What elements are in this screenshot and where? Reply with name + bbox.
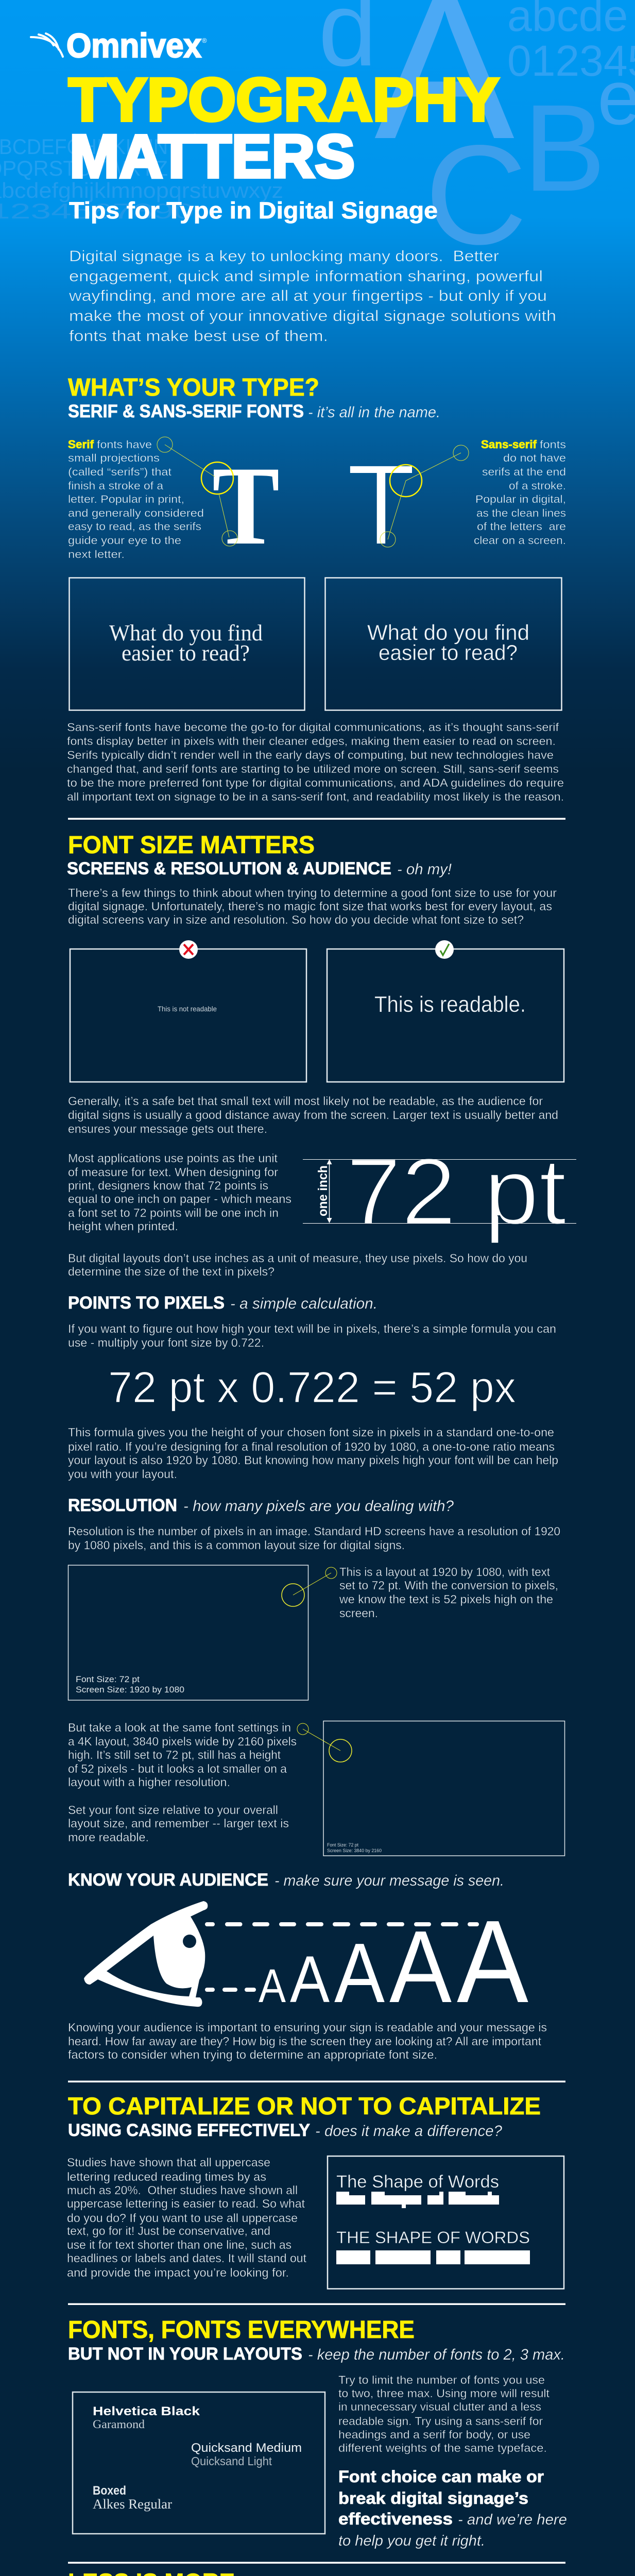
intro paragraph: engagement, quick and simple information sharing, powerful bbox=[69, 268, 543, 285]
text: serif description: letter. Popular in print, bbox=[68, 494, 184, 505]
text: resolution intro bbox=[68, 1524, 560, 1552]
text: sans-serif explanation: fonts display better in pixels with their cleaner edges, making them easier to read on screen. bbox=[67, 735, 556, 748]
text: audience explanation: heard. How far away are they? How big is the screen they are looking at? All are important bbox=[68, 2035, 542, 2048]
text: limit fonts: Try to limit the number of fonts you use bbox=[338, 2374, 545, 2386]
text: intro: There’s a few things to think about when trying to determine a good font size to use for your bbox=[68, 886, 557, 900]
subheading: SCREENS & RESOLUTION & AUDIENCE bbox=[67, 859, 391, 878]
text: points explanation: height when printed. bbox=[68, 1219, 178, 1233]
text: sans-serif description: of a stroke. bbox=[509, 480, 566, 492]
text: sans-serif explanation: changed that, and serif fonts are starting to be utilized more on screen. Still, sans-serif seems bbox=[67, 762, 559, 775]
subheading: BUT NOT IN YOUR LAYOUTS bbox=[68, 2344, 302, 2364]
panel: 3840 by 2160 layout: Font Size: 72 pt bbox=[327, 1842, 358, 1848]
text: sans-serif description: Sans-serif bbox=[481, 438, 537, 451]
text: casing studies: use it for text shorter than one line, such as bbox=[67, 2238, 291, 2251]
panel: font pairs: Garamond bbox=[93, 2418, 145, 2431]
text: serif description: finish a stroke of a bbox=[68, 480, 163, 492]
text: casing studies: lettering reduced reading times by as bbox=[67, 2170, 266, 2183]
text: serif description: easy to read, as the serifs bbox=[68, 521, 201, 533]
text: sans-serif explanation: Serifs typically didn’t render well in the early days of computing, but new technologies have bbox=[67, 749, 554, 761]
decorative background letters: B bbox=[523, 79, 606, 217]
text: casing studies bbox=[67, 2156, 307, 2279]
text: 4K description: Set your font size relative to your overall bbox=[68, 1803, 278, 1817]
panel: not readable sample bbox=[70, 940, 306, 1082]
text: sans-serif description: clear on a screen. bbox=[474, 535, 566, 547]
logo: Omnivex: ® bbox=[202, 37, 207, 44]
letters: growing A sequence: A bbox=[457, 1896, 528, 2027]
text: formula intro: If you want to figure out how high your text will be in pixels, there’s a simple formula you can bbox=[68, 1322, 556, 1335]
sight lines bbox=[207, 1924, 477, 1990]
text: formula intro: use - multiply your font size by 0.722. bbox=[68, 1336, 264, 1349]
callout: sans-serif circles bbox=[380, 445, 469, 547]
text: resolution intro: by 1080 pixels, and this is a common layout size for digital signs. bbox=[68, 1538, 405, 1552]
icon: logo signal arcs bbox=[31, 33, 63, 57]
subheading: resolution: - how many pixels are you dealing with? bbox=[183, 1498, 454, 1515]
panel: fonts, fonts everywhere bbox=[68, 2316, 567, 2549]
intro paragraph: Digital signage is a key to unlocking many doors. Better bbox=[69, 248, 499, 265]
text: sans-serif description: serifs at the end bbox=[482, 466, 566, 478]
callout: font choice: break digital signage’s bbox=[338, 2489, 528, 2507]
chart: 72 pt measurement: 72 pt bbox=[346, 1138, 567, 1244]
panel: shape of words: The Shape of Words bbox=[336, 2172, 499, 2192]
text: casing studies: much as 20%. Other studies have shown all bbox=[67, 2183, 298, 2197]
callout: font choice: - and we’re here bbox=[458, 2512, 567, 2528]
text: points explanation: print, designers know that 72 points is bbox=[68, 1179, 268, 1192]
text: 4K description: a 4K layout, 3840 pixels wide by 2160 pixels bbox=[68, 1735, 297, 1748]
panel: shape of words bbox=[328, 2156, 564, 2289]
title bbox=[68, 66, 499, 191]
decorative background letters: C bbox=[425, 116, 527, 274]
text: 1080 layout description: we know the text is 52 pixels high on the bbox=[339, 1592, 553, 1606]
text: serif description: small projections bbox=[68, 452, 160, 464]
text: formula explanation bbox=[68, 1426, 558, 1481]
panel: serif sample bbox=[69, 578, 305, 710]
text: 4K description bbox=[68, 1721, 297, 1844]
text: pixels question bbox=[68, 1251, 527, 1278]
callout: 1080 text highlight bbox=[282, 1567, 337, 1606]
text: sans-serif description bbox=[474, 438, 566, 547]
text: casing studies: headlines or labels and dates. It will stand out bbox=[67, 2251, 307, 2265]
text: sans-serif explanation bbox=[67, 721, 564, 803]
text: serif description bbox=[68, 438, 204, 561]
text: intro: digital signage. Unfortunately, there’s no magic font size that works best for every layout, as bbox=[68, 900, 552, 913]
panel: serif sample: easier to read? bbox=[122, 640, 250, 666]
text: points explanation: of measure for text. When designing for bbox=[68, 1165, 278, 1179]
formula: 72 pt x 0.722 = 52 px bbox=[108, 1363, 516, 1412]
text: serif description: Serif bbox=[68, 438, 94, 451]
text: 1080 layout description bbox=[339, 1565, 558, 1620]
text: limit fonts: readable sign. Try using a sans-serif for bbox=[338, 2415, 543, 2428]
text: intro: digital screens vary in size and resolution. So how do you decide what font size to set? bbox=[68, 913, 524, 926]
text: formula intro bbox=[68, 1322, 556, 1349]
panel: font pairs: Quicksand Medium bbox=[191, 2441, 302, 2455]
panel: 1920 by 1080 layout: Font Size: 72 pt bbox=[76, 1674, 140, 1684]
panel: font pairs: Helvetica Black bbox=[93, 2404, 200, 2418]
text: audience explanation: factors to consider when trying to determine an appropriate font size. bbox=[68, 2048, 437, 2061]
panel: readable sample: This is readable. bbox=[374, 992, 526, 1017]
title: MATTERS bbox=[70, 123, 355, 191]
subheading: resolution: RESOLUTION bbox=[68, 1496, 177, 1515]
text: formula explanation: you with your layout. bbox=[68, 1467, 177, 1481]
text: 4K description: of 52 pixels - but it looks a lot smaller on a bbox=[68, 1762, 287, 1775]
heading: TO CAPITALIZE OR NOT TO CAPITALIZE bbox=[68, 2092, 541, 2120]
text: 4K description: more readable. bbox=[68, 1831, 149, 1844]
text: sans-serif explanation: all important text on signage to be in a sans-serif font, and readability most likely is the reason. bbox=[67, 790, 564, 803]
text: serif description: next letter. bbox=[68, 549, 125, 561]
letters: growing A sequence: A bbox=[334, 1926, 385, 2020]
intro paragraph: fonts that make best use of them. bbox=[69, 328, 328, 345]
subheading: know your audience: KNOW YOUR AUDIENCE bbox=[68, 1870, 268, 1890]
logo: Omnivex: Omnivex bbox=[66, 26, 201, 64]
text: pixels question: determine the size of the text in pixels? bbox=[68, 1265, 274, 1278]
subheading: - does it make a difference? bbox=[315, 2123, 502, 2140]
text: 1080 layout description: This is a layout at 1920 by 1080, with text bbox=[339, 1565, 551, 1579]
panel: font pairs: Quicksand Light bbox=[191, 2454, 272, 2468]
subheading: USING CASING EFFECTIVELY bbox=[68, 2121, 310, 2140]
subheading: know your audience bbox=[68, 1870, 504, 1890]
text: casing studies: do you do? If you want to use all uppercase bbox=[67, 2211, 298, 2225]
letters: growing A sequence: A bbox=[389, 1910, 452, 2024]
callout: font choice: Font choice can make or bbox=[338, 2467, 544, 2486]
text: casing studies: uppercase lettering is easier to read. So what bbox=[67, 2197, 305, 2210]
callout: font choice: to help you get it right. bbox=[338, 2533, 485, 2549]
text: audience explanation bbox=[68, 2021, 547, 2061]
icon: eye bbox=[84, 1901, 208, 2007]
text: casing studies: Studies have shown that all uppercase bbox=[67, 2156, 270, 2169]
text: limit fonts: to two, three max. Using more will result bbox=[338, 2387, 550, 2400]
icon: red cross bbox=[179, 940, 198, 959]
text: resolution intro: Resolution is the number of pixels in an image. Standard HD screens have a resolution of 1920 bbox=[68, 1524, 560, 1538]
text: formula explanation: This formula gives you the height of your chosen font size in pixels in a standard one-to-one bbox=[68, 1426, 554, 1439]
subheading bbox=[68, 2344, 565, 2364]
panel: 3840 by 2160 layout: Screen Size: 3840 by 2160 bbox=[327, 1848, 382, 1854]
letter: serif T: T bbox=[212, 444, 280, 568]
intro paragraph: wayfinding, and more are all at your fingertips - but only if you bbox=[68, 287, 547, 304]
panel: readable sample bbox=[327, 940, 564, 1082]
panel: sans-serif sample: What do you find bbox=[367, 620, 529, 645]
panel: what's your type bbox=[67, 374, 566, 803]
panel: font pairs: Alkes Regular bbox=[93, 2497, 172, 2512]
text: sans-serif description: do not have bbox=[503, 452, 566, 464]
text: serif description: guide your eye to the bbox=[68, 535, 181, 547]
text: 4K description: layout with a higher resolution. bbox=[68, 1775, 230, 1789]
letters: growing A sequence: A bbox=[290, 1943, 330, 2016]
panel: not readable sample: This is not readable bbox=[158, 1005, 217, 1013]
panel: font pairs bbox=[73, 2392, 325, 2534]
text: sans-serif description: as the clean lines bbox=[476, 507, 566, 519]
text: limit fonts: different weights of the same typeface. bbox=[338, 2442, 547, 2454]
text: points explanation: Most applications use points as the unit bbox=[68, 1151, 278, 1165]
text: larger text is better: Generally, it’s a safe bet that small text will most likely not be readable, as the audience for bbox=[68, 1094, 543, 1108]
text: larger text is better: digital signs is usually a good distance away from the screen. Larger text is usually better and bbox=[68, 1108, 558, 1122]
subheading: - it’s all in the name. bbox=[308, 404, 440, 421]
subheading bbox=[68, 2121, 502, 2140]
arrow: one inch height bbox=[327, 1159, 332, 1223]
text: 4K description: high. It’s still set to 72 pt, still has a height bbox=[68, 1748, 281, 1761]
panel: serif sample: What do you find bbox=[109, 620, 263, 646]
text: larger text is better bbox=[68, 1094, 558, 1136]
text: points explanation bbox=[68, 1151, 291, 1233]
text: 1080 layout description: screen. bbox=[339, 1606, 378, 1620]
text: formula explanation: pixel ratio. If you’re designing for a final resolution of 1920 by 1080, a one-to-one ratio means bbox=[68, 1440, 555, 1453]
icon: green check bbox=[435, 940, 454, 959]
subheading bbox=[68, 401, 440, 421]
panel: font size matters bbox=[67, 832, 576, 2061]
subheading: - oh my! bbox=[397, 861, 452, 878]
text: sans-serif description: Popular in digital, bbox=[475, 494, 566, 505]
text: limit fonts: in unnecessary visual clutter and a less bbox=[338, 2400, 541, 2413]
text: serif description: and generally considered bbox=[68, 507, 204, 519]
word shape: uppercase bbox=[336, 2250, 530, 2264]
word shape: lowercase bbox=[336, 2192, 499, 2208]
label: one inch: one inch bbox=[316, 1165, 330, 1216]
letters: growing A sequence: A bbox=[259, 1960, 286, 2012]
text: points explanation: equal to one inch on paper - which means bbox=[68, 1192, 291, 1206]
letter: sans-serif T: T bbox=[347, 440, 416, 569]
text: sans-serif description: fonts bbox=[540, 439, 566, 451]
text: serif description: (called “serifs”) that bbox=[68, 466, 171, 478]
text: sans-serif description: of the letters are bbox=[477, 521, 566, 533]
subheading: know your audience: - make sure your message is seen. bbox=[274, 1872, 504, 1889]
text: casing studies: text, go for it! Just be conservative, and bbox=[67, 2224, 270, 2238]
heading: FONTS, FONTS EVERYWHERE bbox=[68, 2316, 415, 2344]
panel: to capitalize bbox=[67, 2092, 564, 2289]
subheading: points to pixels: POINTS TO PIXELS bbox=[68, 1293, 225, 1313]
intro paragraph bbox=[68, 248, 556, 345]
callout: font choice: effectiveness bbox=[338, 2510, 453, 2528]
text: sans-serif explanation: to be the more preferred font type for digital communications, and ADA guidelines do require bbox=[67, 776, 564, 789]
text: audience explanation: Knowing your audience is important to ensuring your sign is readable and your message is bbox=[68, 2021, 547, 2034]
panel: 1920 by 1080 layout: Screen Size: 1920 by 1080 bbox=[76, 1685, 184, 1694]
panel: sans-serif sample bbox=[325, 578, 561, 710]
subheading: points to pixels bbox=[68, 1293, 377, 1313]
subheading: resolution bbox=[68, 1496, 454, 1515]
panel: 3840 by 2160 layout bbox=[323, 1721, 564, 1856]
text: formula explanation: your layout is also 1920 by 1080. But knowing how many pixels high your font will be can help bbox=[68, 1453, 558, 1467]
title: TYPOGRAPHY bbox=[68, 66, 499, 134]
panel: shape of words: THE SHAPE OF WORDS bbox=[336, 2228, 530, 2247]
subheading: SERIF & SANS-SERIF FONTS bbox=[68, 401, 304, 421]
heading: WHAT’S YOUR TYPE? bbox=[68, 374, 319, 401]
subheading: points to pixels: - a simple calculation. bbox=[230, 1295, 377, 1312]
text: serif description: fonts have bbox=[97, 439, 152, 451]
text: limit fonts: headings and a serif for body, or use bbox=[338, 2428, 530, 2441]
panel: 1920 by 1080 layout bbox=[68, 1565, 308, 1700]
text: intro bbox=[68, 886, 557, 926]
text: points explanation: a font set to 72 points will be one inch in bbox=[68, 1206, 279, 1219]
callout: 2160 text highlight bbox=[297, 1723, 352, 1762]
text: 1080 layout description: set to 72 pt. With the conversion to pixels, bbox=[339, 1579, 558, 1592]
decorative background letters bbox=[0, 0, 635, 274]
text: larger text is better: ensures your message gets out there. bbox=[68, 1122, 267, 1136]
subtitle: Tips for Type in Digital Signage bbox=[69, 197, 438, 224]
text: casing studies: and provide the impact you’re looking for. bbox=[67, 2266, 289, 2279]
letters: growing A sequence bbox=[259, 1896, 528, 2027]
subheading: - keep the number of fonts to 2, 3 max. bbox=[308, 2346, 565, 2363]
text: 4K description: layout size, and remember -- larger text is bbox=[68, 1817, 289, 1830]
text: limit fonts bbox=[338, 2374, 550, 2454]
callout: serif circles bbox=[157, 437, 237, 546]
text: 4K description: But take a look at the same font settings in bbox=[68, 1721, 291, 1734]
heading: FONT SIZE MATTERS bbox=[68, 832, 315, 859]
callout: font choice bbox=[338, 2467, 567, 2549]
panel: sans-serif sample: easier to read? bbox=[379, 640, 518, 665]
intro paragraph: make the most of your innovative digital signage solutions with bbox=[69, 308, 556, 325]
panel: font pairs: Boxed bbox=[93, 2484, 126, 2498]
text: pixels question: But digital layouts don’t use inches as a unit of measure, they use pixels. So how do you bbox=[68, 1251, 527, 1265]
text: sans-serif explanation: Sans-serif fonts have become the go-to for digital communications, as it’s thought sans-serif bbox=[67, 721, 559, 734]
